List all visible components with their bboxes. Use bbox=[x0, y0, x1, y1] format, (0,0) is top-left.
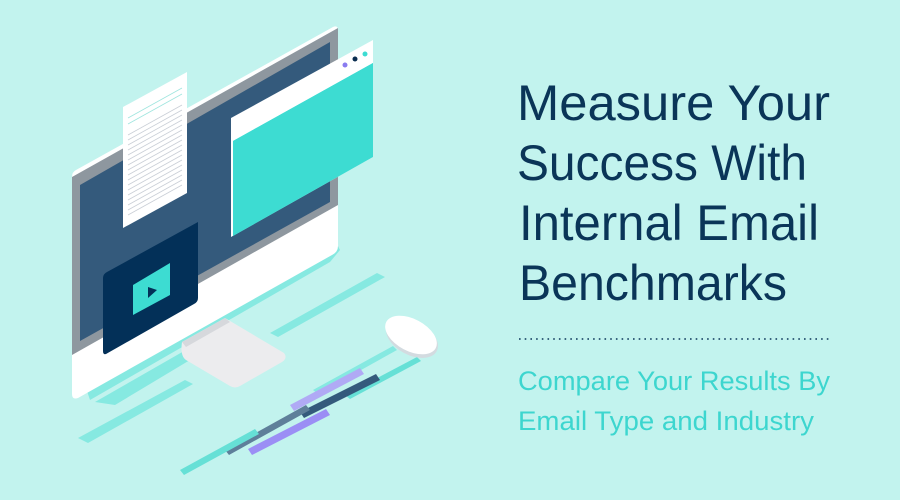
title bbox=[517, 75, 830, 311]
video player bbox=[103, 222, 198, 354]
title: Success With bbox=[517, 135, 807, 191]
subtitle bbox=[518, 366, 831, 436]
subtitle: Compare Your Results By bbox=[518, 366, 831, 396]
floor stripes bbox=[78, 273, 421, 475]
title: Internal Email bbox=[519, 195, 819, 251]
dotted divider bbox=[519, 338, 831, 340]
subtitle: Email Type and Industry bbox=[518, 406, 815, 436]
title: Benchmarks bbox=[519, 255, 787, 311]
browser window bbox=[231, 40, 373, 237]
monitor stand bbox=[182, 318, 286, 388]
monitor shadow bbox=[85, 240, 340, 405]
title: Measure Your bbox=[517, 75, 830, 131]
monitor bbox=[72, 26, 338, 399]
paper document bbox=[123, 72, 187, 228]
screen bbox=[80, 42, 330, 341]
mouse bbox=[379, 308, 445, 366]
